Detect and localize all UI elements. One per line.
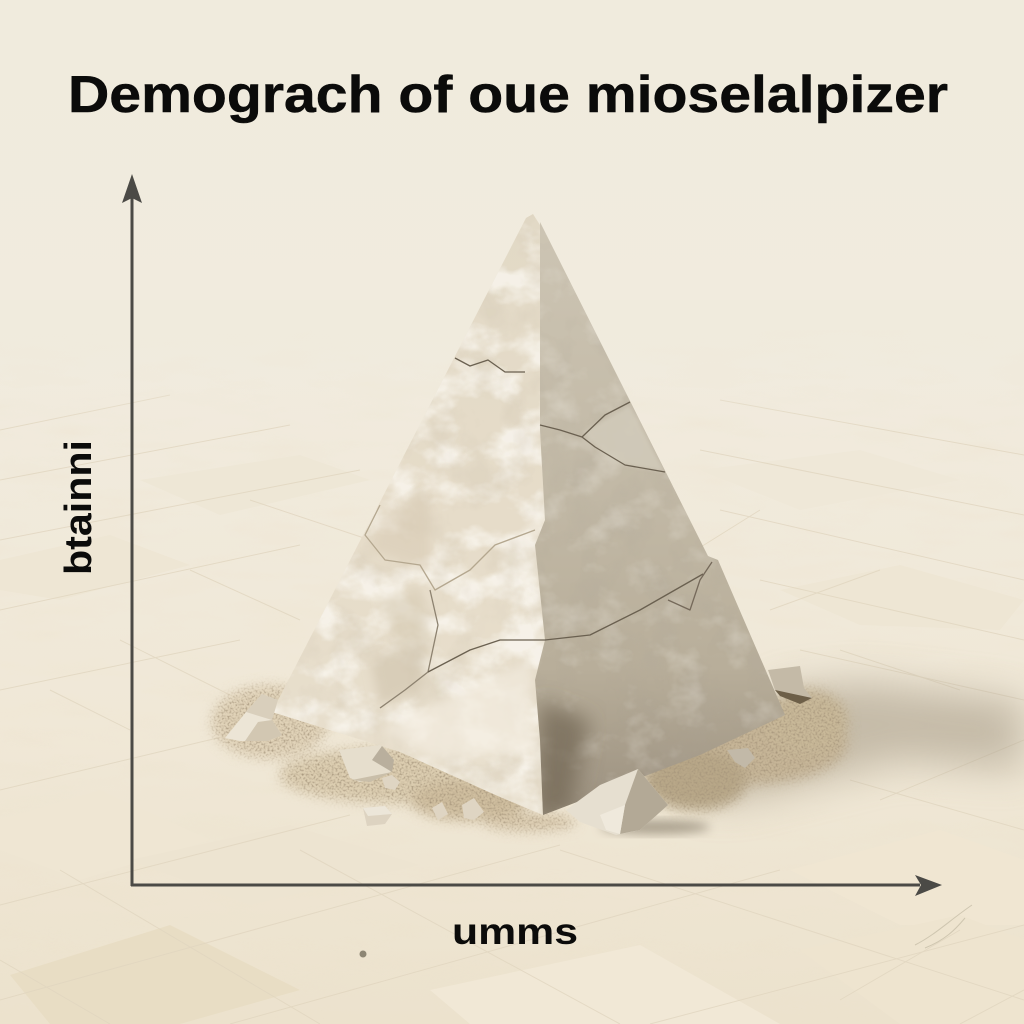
- x axis label: umms: [452, 911, 578, 952]
- rock: front left: [339, 745, 394, 782]
- title: Demograch of oue mioselalpizer: [68, 66, 948, 124]
- y axis: [122, 174, 142, 886]
- x axis: [131, 875, 942, 896]
- cracks: [365, 358, 712, 708]
- pyramid: [260, 210, 800, 820]
- rock: far left: [225, 694, 282, 741]
- signature scribble: [915, 905, 972, 948]
- small dot on floor: [360, 950, 366, 958]
- shaded right face: [530, 210, 800, 820]
- rock: tiny pebbles: [382, 748, 755, 820]
- sand pile: [212, 686, 848, 830]
- back-right rock: [768, 666, 812, 704]
- shadow of pyramid: [600, 682, 1024, 834]
- y axis label: btainni: [58, 440, 100, 575]
- rock: small pebble: [363, 806, 392, 826]
- left lit face: [274, 214, 544, 815]
- rock: large front: [566, 769, 668, 835]
- rocks: [225, 694, 755, 835]
